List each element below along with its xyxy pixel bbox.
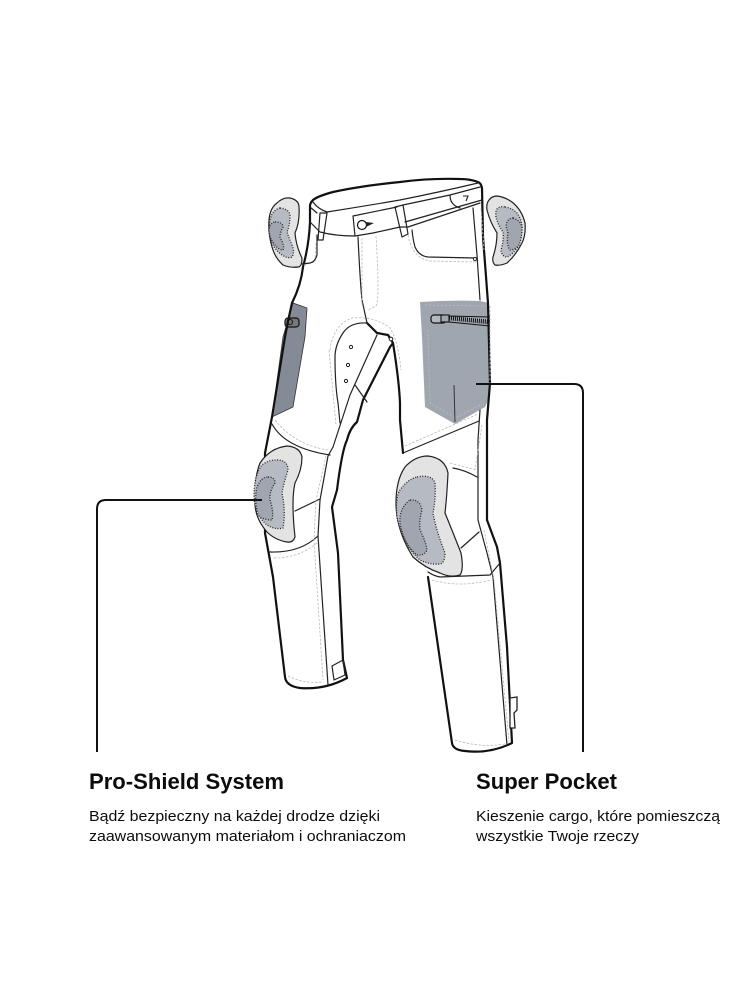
- heading: Super Pocket: Super Pocket: [476, 769, 617, 794]
- description: Super Pocket: Kieszenie cargo, które pomieszczą: [476, 808, 721, 825]
- brand mark: [463, 196, 468, 201]
- description: Pro-Shield System: [89, 808, 406, 845]
- description: Super Pocket: wszystkie Twoje rzeczy: [475, 828, 640, 845]
- illustration: riding trousers: [254, 179, 525, 752]
- waistband: [310, 183, 482, 323]
- side seams: [302, 208, 480, 300]
- left cargo pocket: [272, 303, 307, 417]
- right knee protector: [396, 456, 462, 576]
- knee panel seams: [270, 306, 509, 745]
- callout line: Pro-Shield System: [97, 500, 262, 752]
- left hip protector: [269, 198, 302, 267]
- description: Pro-Shield System: zaawansowanym materiałom i ochraniaczom: [89, 828, 406, 845]
- text block: Super Pocket: [475, 769, 721, 845]
- hem straps: [332, 660, 517, 728]
- right cargo pocket: [420, 301, 490, 424]
- right hip protector: [487, 196, 525, 265]
- inner thigh panel: [329, 318, 401, 447]
- description: Pro-Shield System: Bądź bezpieczny na każdej drodze dzięki: [89, 808, 380, 825]
- left knee protector: [254, 446, 302, 542]
- text block: Pro-Shield System: [89, 769, 406, 845]
- callout line: Super Pocket: [476, 384, 583, 752]
- waist button: [358, 220, 366, 230]
- belt loops: [395, 205, 408, 237]
- description: Super Pocket: [475, 808, 721, 845]
- heading: Pro-Shield System: Pro-Shield System: [89, 769, 284, 794]
- front pocket: [412, 230, 475, 258]
- trouser outline: [265, 179, 512, 752]
